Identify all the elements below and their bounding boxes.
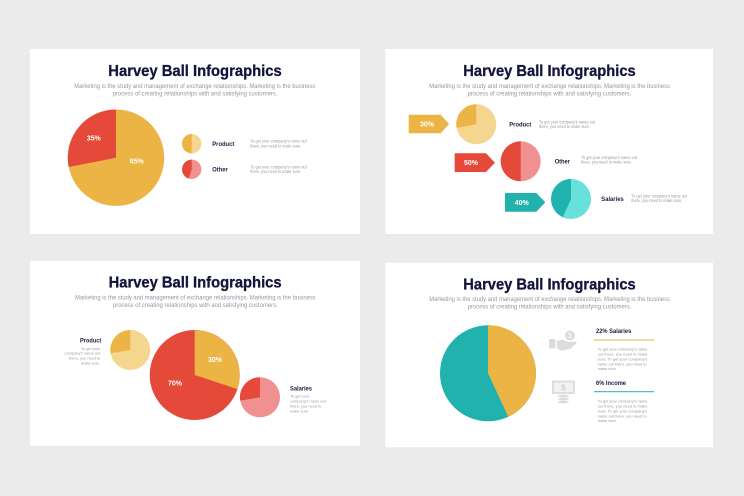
description: salaries: make sure. [290, 408, 309, 413]
description: other: there, you need to make sure. [581, 160, 632, 165]
harvey ball: product [456, 104, 496, 144]
label: other: Other [212, 167, 228, 174]
description: salaries: To get your company's name out [631, 193, 688, 198]
description: product: make sure. [81, 361, 100, 366]
label: product: Product [509, 122, 532, 129]
harvey ball: other [182, 160, 201, 179]
divider: yellow [594, 340, 654, 341]
subtitle [75, 295, 316, 309]
description: salaries: there, you need to [290, 403, 321, 408]
icon: hand with coin [549, 330, 577, 351]
subtitle: Marketing is the study and management of exchange relationships. Marketing is the business [429, 83, 671, 90]
harvey ball: salaries [240, 377, 280, 417]
pie chart: 65% and 35%: 35% [87, 136, 101, 142]
description: salaries: name out there, you need to [598, 361, 647, 366]
description: product: there, you need to [69, 356, 100, 361]
subtitle: Marketing is the study and management of exchange relationships. Marketing is the business [74, 83, 316, 90]
title: Harvey Ball Infographics [463, 63, 636, 80]
label: salaries: Salaries [290, 386, 312, 393]
description: salaries: company's name out [290, 399, 327, 404]
label: salaries: Salaries [601, 196, 624, 203]
description: salaries: sure. To get your company's [598, 356, 647, 361]
subtitle [74, 83, 316, 98]
description: product: To get your [81, 346, 101, 351]
description: salaries: there, you need to make sure. [631, 198, 682, 203]
description: salaries: To get your company's name [598, 347, 647, 352]
description: salaries [290, 394, 327, 413]
description: product [65, 346, 101, 366]
description: other: there, you need to make sure. [250, 169, 301, 174]
subtitle: process of creating relationships with and satisfying customers. [468, 91, 631, 98]
panel: pie with icons [385, 263, 713, 447]
subtitle: Marketing is the study and management of exchange relationships. Marketing is the business [429, 296, 671, 303]
description: product [539, 119, 596, 129]
description: product: there, you need to make sure. [539, 124, 590, 129]
harvey ball: other [501, 141, 541, 181]
icon: hand with coin: 1 [568, 333, 572, 340]
description: income: out there, you need to make [598, 403, 647, 408]
label: other: Other [555, 159, 570, 166]
description: income: name out there, you need to [598, 413, 647, 418]
arrow: 30% [409, 115, 449, 133]
description: income: make sure. [598, 418, 617, 423]
panel: single pie with legend [30, 49, 360, 234]
title: Harvey Ball Infographics [109, 275, 282, 292]
label: product: Product [212, 141, 235, 148]
panel: arrows with harvey balls [385, 49, 713, 234]
description: product: company's name out [65, 351, 101, 356]
pie chart: 65% and 35%: 65% [130, 158, 144, 166]
description: product: To get your company's name out [539, 119, 596, 124]
description: product: To get your company's name out [250, 139, 307, 144]
arrow: 40%: 40% [515, 200, 529, 207]
description: other [581, 155, 638, 165]
heading: 22% salaries: 22% Salaries [596, 328, 631, 335]
pie chart: 70% and 30%: 30% [208, 357, 223, 364]
description: product: there, you need to make sure. [250, 143, 301, 148]
arrow: 30%: 30% [420, 122, 435, 128]
description: other: To get your company's name out [581, 155, 638, 160]
subtitle: Marketing is the study and management of exchange relationships. Marketing is the business [75, 295, 316, 302]
icon: banknote and coins: $ [561, 384, 566, 392]
description: other [250, 164, 307, 174]
description: income [598, 399, 647, 423]
harvey ball: salaries [551, 179, 591, 219]
label: product: Product [80, 338, 102, 345]
pie chart: 65% and 35% [68, 110, 164, 206]
pie chart: 70% and 30%: 70% [168, 380, 183, 388]
icon: banknote and coins [552, 380, 575, 403]
description: other: To get your company's name out [250, 164, 307, 169]
description: salaries [631, 193, 688, 203]
subtitle: process of creating relationships with and satisfying customers. [113, 91, 277, 98]
arrow: 50% [455, 153, 495, 172]
subtitle: process of creating relationships with and satisfying customers. [468, 304, 631, 311]
subtitle: process of creating relationships with and satisfying customers. [113, 302, 278, 309]
description: salaries [598, 347, 647, 371]
arrow: 40% [505, 193, 545, 212]
pie chart: 70% and 30% [150, 330, 240, 420]
description: income: sure. To get your company's [598, 408, 647, 413]
description: salaries: To get your [290, 394, 310, 399]
title: Harvey Ball Infographics [108, 63, 282, 80]
arrow: 50%: 50% [464, 160, 479, 167]
harvey ball: product [110, 330, 150, 370]
harvey ball: product [182, 134, 201, 153]
subtitle [429, 296, 671, 311]
heading: 6% income: 6% Income [596, 380, 626, 387]
divider: teal [594, 391, 654, 392]
description: income: To get your company's name [598, 399, 647, 404]
title: Harvey Ball Infographics [463, 276, 636, 293]
subtitle [429, 83, 671, 98]
description: salaries: out there, you need to make [598, 351, 647, 356]
pie chart [440, 325, 536, 421]
description: product [250, 139, 307, 148]
description: salaries: make sure. [598, 366, 617, 371]
panel: three overlapping balls [30, 261, 360, 446]
